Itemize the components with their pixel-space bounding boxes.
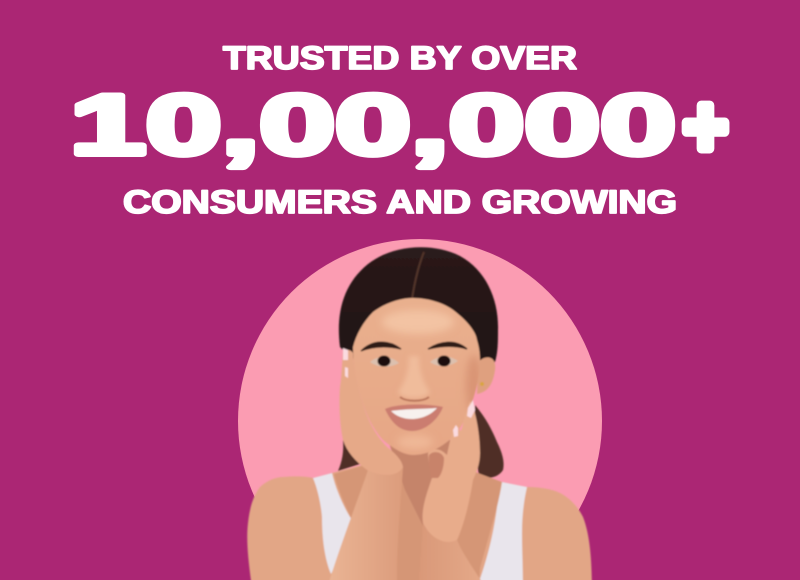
heading: trusted by over: TRUSTED BY OVER [223, 40, 577, 76]
left eye [370, 356, 399, 367]
ear [477, 357, 495, 394]
big number: 10,00,000 [70, 78, 676, 173]
nose [398, 356, 430, 398]
subheading: consumers and growing: CONSUMERS AND GROWING [123, 184, 677, 220]
face base [352, 296, 482, 456]
hair parting [412, 252, 424, 299]
face [352, 296, 482, 456]
pink circle [238, 239, 602, 580]
torso and shoulders [247, 455, 592, 580]
chest shadow [334, 455, 502, 580]
tank top right [474, 482, 527, 580]
plus sign: + [683, 79, 728, 173]
right eyebrow [428, 342, 467, 349]
chin highlight [399, 436, 431, 449]
neck shadow [388, 440, 462, 530]
tank top left [313, 473, 353, 574]
portrait of smiling woman [247, 247, 592, 580]
left hand [339, 350, 403, 475]
earring [480, 382, 484, 386]
cheek shading [465, 356, 480, 405]
thumb shadow [429, 452, 444, 478]
right hand [423, 401, 480, 542]
right eye [430, 356, 458, 366]
right forearm [418, 523, 490, 580]
fingernails [343, 348, 475, 437]
mouth [385, 405, 443, 431]
hair [339, 247, 498, 372]
teeth [391, 408, 437, 419]
left forearm [325, 467, 403, 580]
forehead highlight [382, 310, 454, 334]
braid [475, 405, 504, 478]
left hair strands [338, 440, 360, 471]
nose shadow [400, 397, 429, 401]
left eyebrow [361, 342, 401, 351]
